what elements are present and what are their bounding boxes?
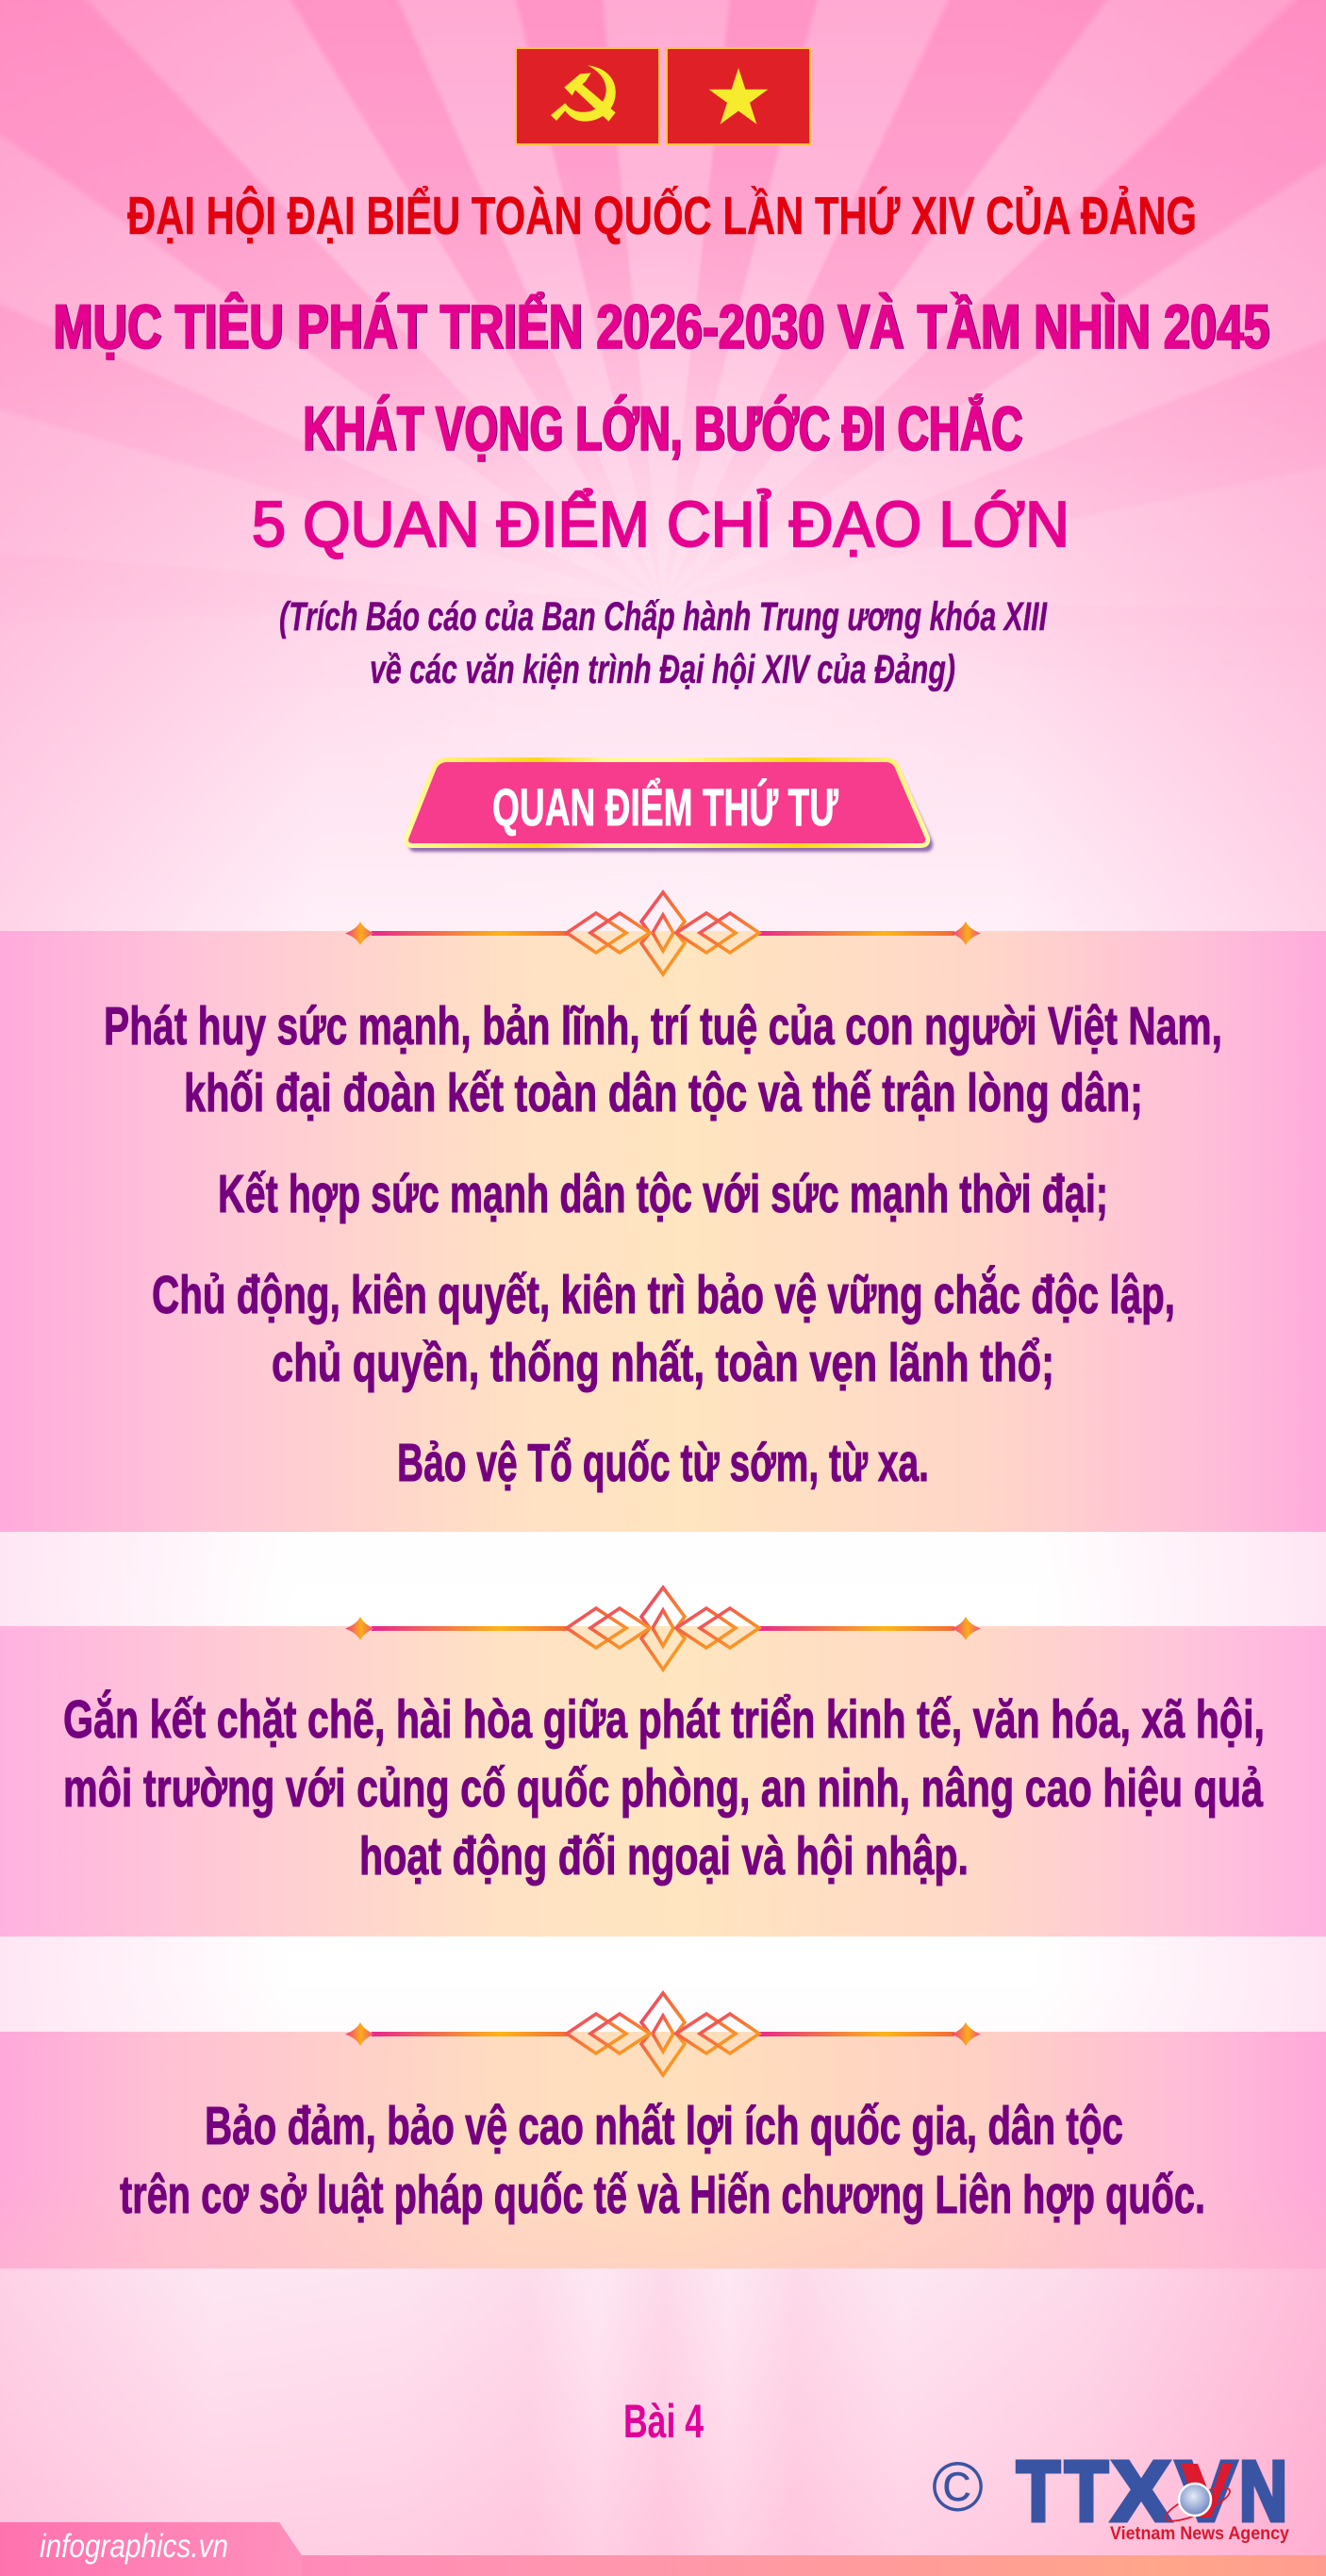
logo: TTXVN: N [1239, 2445, 1287, 2539]
icon: national flag [667, 48, 810, 144]
bottom strip [0, 2555, 1326, 2576]
ornament divider 1 [345, 892, 981, 974]
heading: five viewpoints: 5 QUAN ĐIỂM CHỈ ĐẠO LỚN [252, 488, 1069, 560]
title line 3: KHÁT VỌNG LỚN, BƯỚC ĐI CHẮC [303, 393, 1022, 463]
ornament divider 2 [345, 1587, 981, 1670]
logo: TTXVN: T [1065, 2445, 1108, 2539]
text block: band 2: hoạt động đối ngoại và hội nhập. [359, 1826, 969, 1886]
ornament divider 3 [345, 1993, 981, 2075]
source note [279, 594, 1048, 692]
background: pale edges beside the bands [0, 931, 1326, 2272]
panel: band 3 [0, 2032, 1326, 2269]
tab: infographics.vn: infographics.vn [40, 2528, 228, 2565]
logo: TTXVN: Vietnam News Agency [1110, 2524, 1289, 2544]
tab: infographics.vn [0, 2522, 302, 2576]
text block: band 1: Bảo vệ Tổ quốc từ sớm, từ xa. [397, 1433, 929, 1493]
background: central glow and darker edges [0, 0, 1326, 931]
text block: band 1 [104, 996, 1222, 1493]
logo: TTXVN: T [1017, 2445, 1060, 2539]
text block: band 2 [63, 1688, 1265, 1886]
button: fourth viewpoint: QUAN ĐIỂM THỨ TƯ [492, 777, 838, 837]
logo: TTXVN [1017, 2445, 1289, 2544]
panel: band 1 [0, 931, 1326, 1532]
text block: band 1: chủ quyền, thống nhất, toàn vẹn lãnh thổ; [272, 1333, 1054, 1393]
text block: band 3 [120, 2096, 1205, 2225]
logo: TTXVN: X [1112, 2445, 1170, 2539]
article number: Bài 4 [623, 2395, 704, 2448]
button: fourth viewpoint [406, 760, 933, 852]
source note: về các văn kiện trình Đại hội XIV của Đảng) [370, 647, 955, 692]
background: bottom curtain stripes [0, 2269, 1326, 2555]
logo: TTXVN: V [1176, 2445, 1236, 2539]
panel: band 2 [0, 1626, 1326, 1936]
icon: party flag [516, 48, 659, 144]
background: top light rays [0, 0, 1326, 419]
copyright symbol: © [932, 2448, 984, 2526]
